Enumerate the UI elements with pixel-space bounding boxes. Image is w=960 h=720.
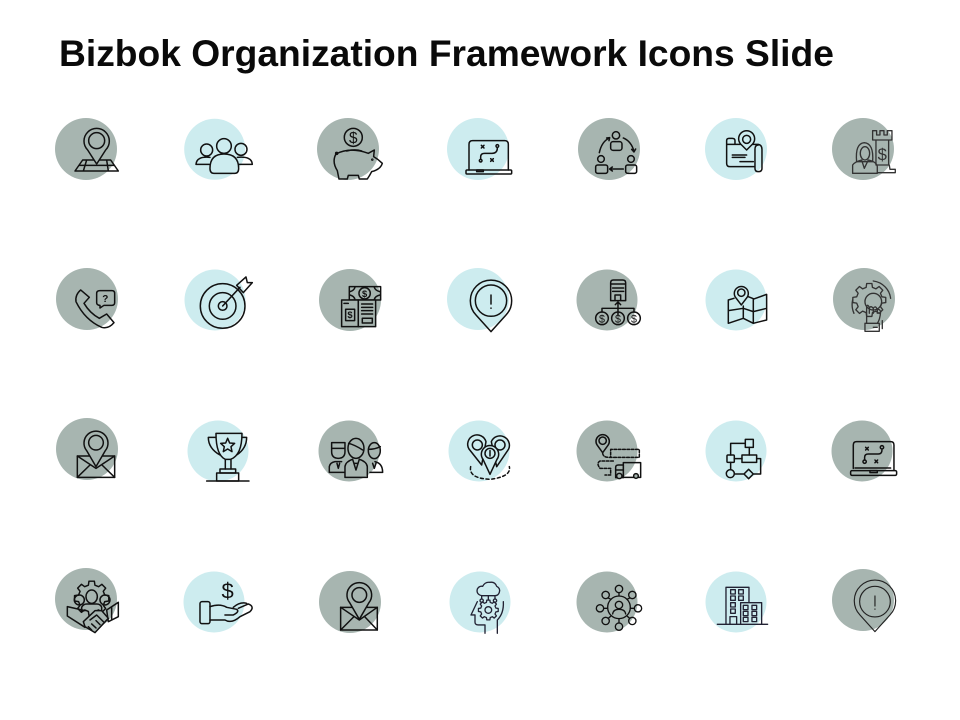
icon: building with dollar coins: $ <box>631 313 637 325</box>
icon: alert pin <box>447 268 512 332</box>
icon: people cycle <box>578 118 640 180</box>
icon: pin on map <box>55 118 118 180</box>
icon: building with dollar coins: $ <box>599 313 605 325</box>
icon: phone with question bubble: ? <box>102 294 108 305</box>
icon: money and invoices <box>319 269 381 331</box>
icon: businesswoman and finance tower <box>832 118 895 180</box>
icon: hand touching gear <box>833 268 895 331</box>
icon: building with dollar coins: $ <box>615 313 621 325</box>
icon: pin over envelope <box>56 418 118 480</box>
icon: trophy with star <box>188 420 249 482</box>
icon: folded map with pin <box>706 270 767 330</box>
icon: people network <box>576 572 642 632</box>
icon: hand with dollar <box>184 572 252 632</box>
title: Bizbok Organization Framework Icons Slide <box>59 32 834 74</box>
icon: businesswoman and finance tower: $ <box>878 145 887 164</box>
icon: delivery truck route <box>576 420 641 482</box>
icon: money and invoices: $ <box>362 289 368 299</box>
icon: laptop with route, large <box>832 420 897 482</box>
icon: head with cloud and gear <box>450 572 510 633</box>
icon: office buildings <box>706 572 768 632</box>
icon: scroll map with pin <box>705 118 767 180</box>
icon: flowchart <box>706 420 766 482</box>
icon: gear, team and handshake <box>55 568 118 633</box>
icon: team of three <box>184 119 252 180</box>
icon: money and invoices: $ <box>347 310 353 320</box>
icon: building with dollar coins <box>576 270 640 330</box>
icon: phone with question bubble <box>56 268 118 330</box>
icon: hand with dollar: $ <box>222 578 234 603</box>
icon: piggy bank with coin: $ <box>349 130 358 147</box>
icon: target with arrow <box>184 270 252 330</box>
icon: pin over envelope, lower <box>319 571 381 633</box>
icon: laptop with strategy route <box>447 118 512 180</box>
icon: business team <box>318 420 383 482</box>
icon: piggy bank with coin <box>317 118 382 180</box>
icon: three location pins on ground <box>448 420 510 482</box>
icon: alert pin, grey <box>832 569 896 632</box>
